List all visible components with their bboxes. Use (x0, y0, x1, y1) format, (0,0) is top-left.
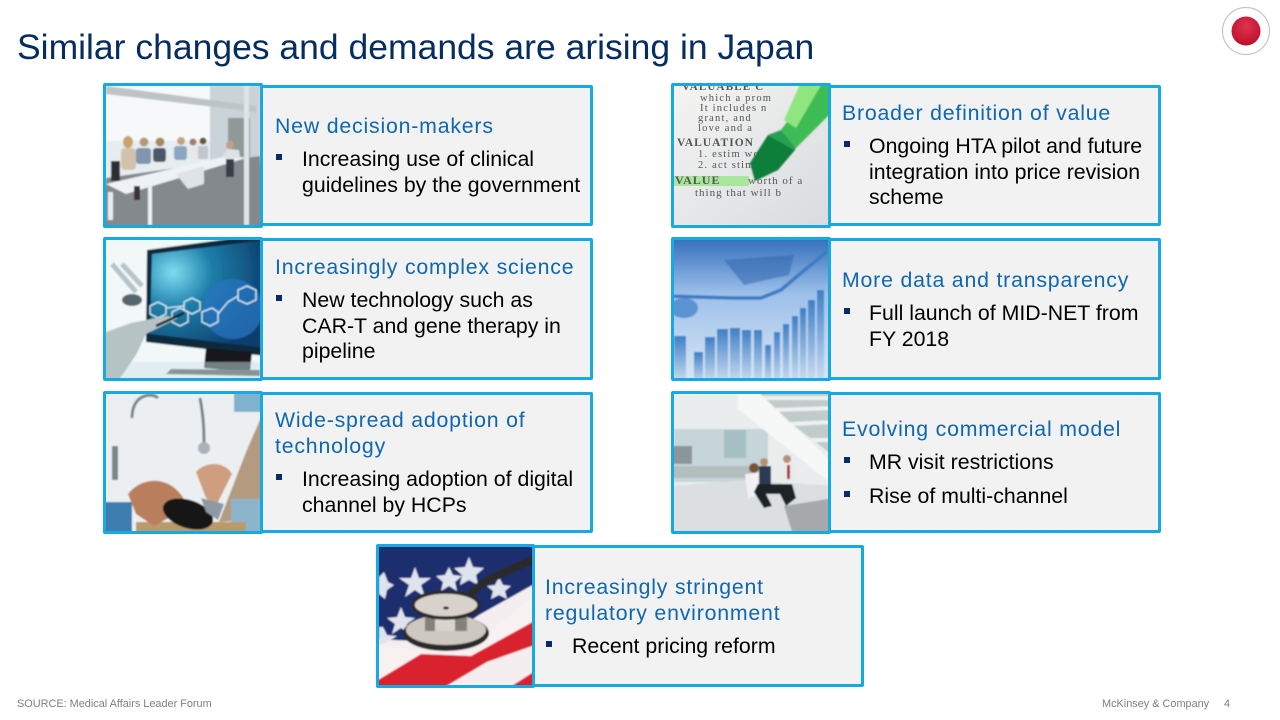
footer: company and page number: 4 (1224, 698, 1230, 710)
icon: Japan flag (1222, 6, 1270, 56)
heading: wide-spread adoption of technology (275, 408, 525, 458)
bullet text: integration into price revision (869, 160, 1140, 184)
bullet text: guidelines by the government (302, 173, 580, 197)
bullet list (844, 450, 1068, 508)
photo: highlighter on dictionary: grant, and (698, 113, 752, 124)
heading: wide-spread adoption of technology: technology (275, 434, 386, 458)
photo: business people in lobby (671, 391, 831, 534)
photo: highlighter on dictionary: thing that will b (695, 187, 782, 199)
bullet text: Increasing use of clinical (302, 147, 534, 171)
heading: evolving commercial model: Evolving commercial model (842, 417, 1121, 441)
panel: wide-spread adoption of technology (103, 391, 593, 534)
photo: highlighter on dictionary: love and a (698, 123, 753, 134)
photo: highlighter on dictionary: VALUE (675, 173, 720, 187)
photo: highlighter on dictionary: It includes n (700, 103, 768, 114)
photo: doctor at laptop (103, 391, 263, 534)
heading: increasingly complex science: Increasingly complex science (275, 255, 574, 279)
bullet text: FY 2018 (869, 327, 949, 351)
panel: more data and transparency (671, 237, 1161, 381)
photo: highlighter on dictionary: 2. act stimat (698, 160, 765, 171)
bullet text: channel by HCPs (302, 493, 467, 517)
panel: increasingly stringent regulatory environment (376, 544, 864, 688)
photo: highlighter on dictionary (671, 83, 831, 228)
panel: evolving commercial model (671, 391, 1161, 534)
photo: highlighter on dictionary: VALUATION (677, 137, 754, 149)
heading: more data and transparency: More data and transparency (842, 268, 1129, 292)
photo: blue financial chart (671, 237, 831, 381)
panel: broader definition of value (671, 83, 1161, 228)
bullet text: scheme (869, 185, 944, 209)
heading: increasingly stringent regulatory environment (545, 575, 780, 625)
bullet list: Rise of multi-channel (869, 484, 1068, 508)
photo: stethoscope on US flag (376, 544, 535, 688)
photo: highlighter on dictionary: 1. estim wor (698, 149, 765, 160)
bullet text: pipeline (302, 339, 375, 363)
bullet text: New technology such as (302, 288, 533, 312)
title: Similar changes and demands are arising in Japan (17, 27, 814, 67)
heading: new decision-makers: New decision-makers (275, 114, 494, 138)
heading: broader definition of value: Broader definition of value (842, 101, 1111, 125)
footer: company and page number: McKinsey & Company (1102, 698, 1209, 710)
bullet text: Full launch of MID-NET from (869, 301, 1138, 325)
bullet text (844, 301, 1138, 351)
photo: monitor with molecule (103, 237, 263, 381)
bullet text: CAR-T and gene therapy in (302, 314, 561, 338)
heading: wide-spread adoption of technology: Wide-spread adoption of (275, 408, 525, 432)
heading: increasingly stringent regulatory environment: Increasingly stringent (545, 575, 764, 599)
bullet text (844, 134, 1142, 209)
bullet text (276, 288, 561, 363)
bullet text: Increasing adoption of digital (302, 467, 573, 491)
photo: highlighter on dictionary: which a prom (700, 93, 772, 104)
panel: new decision-makers (103, 83, 593, 228)
panel: increasingly complex science (103, 237, 593, 381)
bullet text: Ongoing HTA pilot and future (869, 134, 1142, 158)
bullet text (276, 467, 573, 517)
photo: highlighter on dictionary: worth of a (748, 175, 803, 187)
bullet text: Recent pricing reform (572, 634, 776, 658)
photo: meeting room (103, 83, 263, 228)
bullet list: MR visit restrictions (869, 450, 1054, 474)
source note: SOURCE: Medical Affairs Leader Forum (17, 698, 212, 710)
bullet text (276, 147, 580, 197)
heading: increasingly stringent regulatory environment: regulatory environment (545, 601, 780, 625)
